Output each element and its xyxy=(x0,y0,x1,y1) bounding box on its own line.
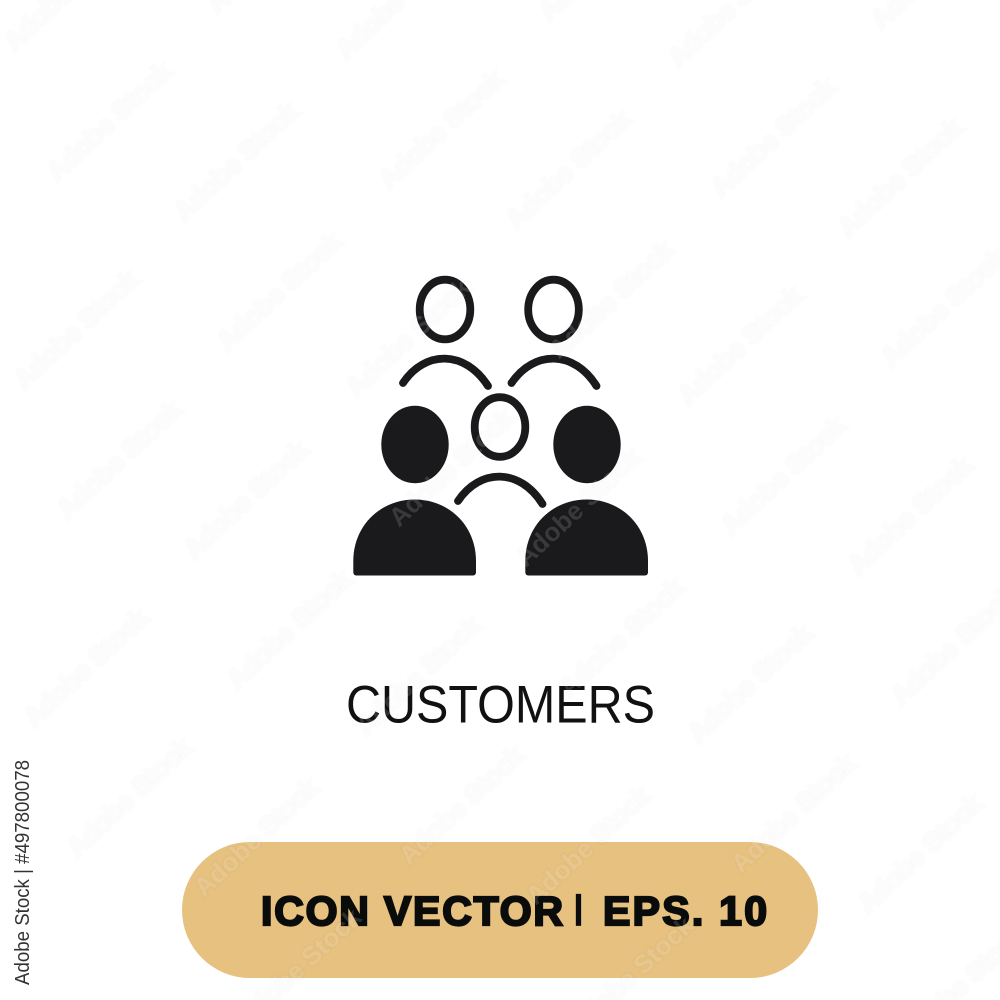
watermark pattern: Adobe Stock xyxy=(221,564,358,694)
watermark pattern: Adobe Stock xyxy=(178,434,315,564)
watermark pattern: Adobe Stock xyxy=(350,610,487,740)
watermark pattern: Adobe Stock xyxy=(543,234,680,364)
icon: back left person outline xyxy=(403,280,488,386)
stock id side label: Adobe Stock | #497800078 xyxy=(12,760,34,985)
watermark pattern: Adobe Stock xyxy=(211,226,348,356)
watermark pattern: Adobe Stock xyxy=(553,572,690,702)
watermark pattern: Adobe Stock xyxy=(852,788,989,918)
icon: back right person outline xyxy=(512,280,596,386)
watermark pattern: Adobe Stock xyxy=(725,748,862,878)
watermark pattern: Adobe Stock xyxy=(842,450,979,580)
badge text: icon vector: ICON VECTOR xyxy=(261,888,563,934)
watermark pattern: Adobe Stock xyxy=(373,64,510,194)
icon: front left person solid xyxy=(353,406,476,576)
icon: front right person solid xyxy=(525,406,648,576)
watermark pattern: Adobe Stock xyxy=(8,264,145,394)
watermark pattern: Adobe Stock xyxy=(510,442,647,572)
icon: customers group xyxy=(353,280,648,576)
watermark pattern: Adobe Stock xyxy=(383,402,520,532)
watermark pattern: Adobe Stock xyxy=(672,280,809,410)
watermark pattern: Adobe Stock xyxy=(500,104,637,234)
watermark pattern: Adobe Stock xyxy=(188,772,325,902)
badge: icon vector eps 10 xyxy=(182,842,818,978)
watermark pattern: Adobe Stock xyxy=(832,112,969,242)
watermark pattern: Adobe Stock xyxy=(18,602,155,732)
watermark pattern: Adobe Stock xyxy=(393,740,530,870)
watermark pattern: Adobe Stock xyxy=(520,780,657,910)
badge background pill xyxy=(182,842,818,978)
watermark pattern: Adobe Stock xyxy=(682,618,819,748)
icon: centre person outline xyxy=(458,397,542,504)
watermark pattern: Adobe Stock xyxy=(41,56,178,186)
watermark pattern: Adobe Stock xyxy=(168,96,305,226)
title: customers: CUSTOMERS xyxy=(346,676,655,734)
watermark pattern: Adobe Stock xyxy=(715,410,852,540)
watermark pattern: Adobe Stock xyxy=(340,272,477,402)
watermark pattern: Adobe Stock xyxy=(61,732,198,862)
badge separator: | xyxy=(574,889,583,925)
watermark pattern: Adobe Stock xyxy=(51,394,188,524)
badge text: eps 10: EPS. 10 xyxy=(603,888,767,934)
watermark pattern: Adobe Stock xyxy=(705,72,842,202)
